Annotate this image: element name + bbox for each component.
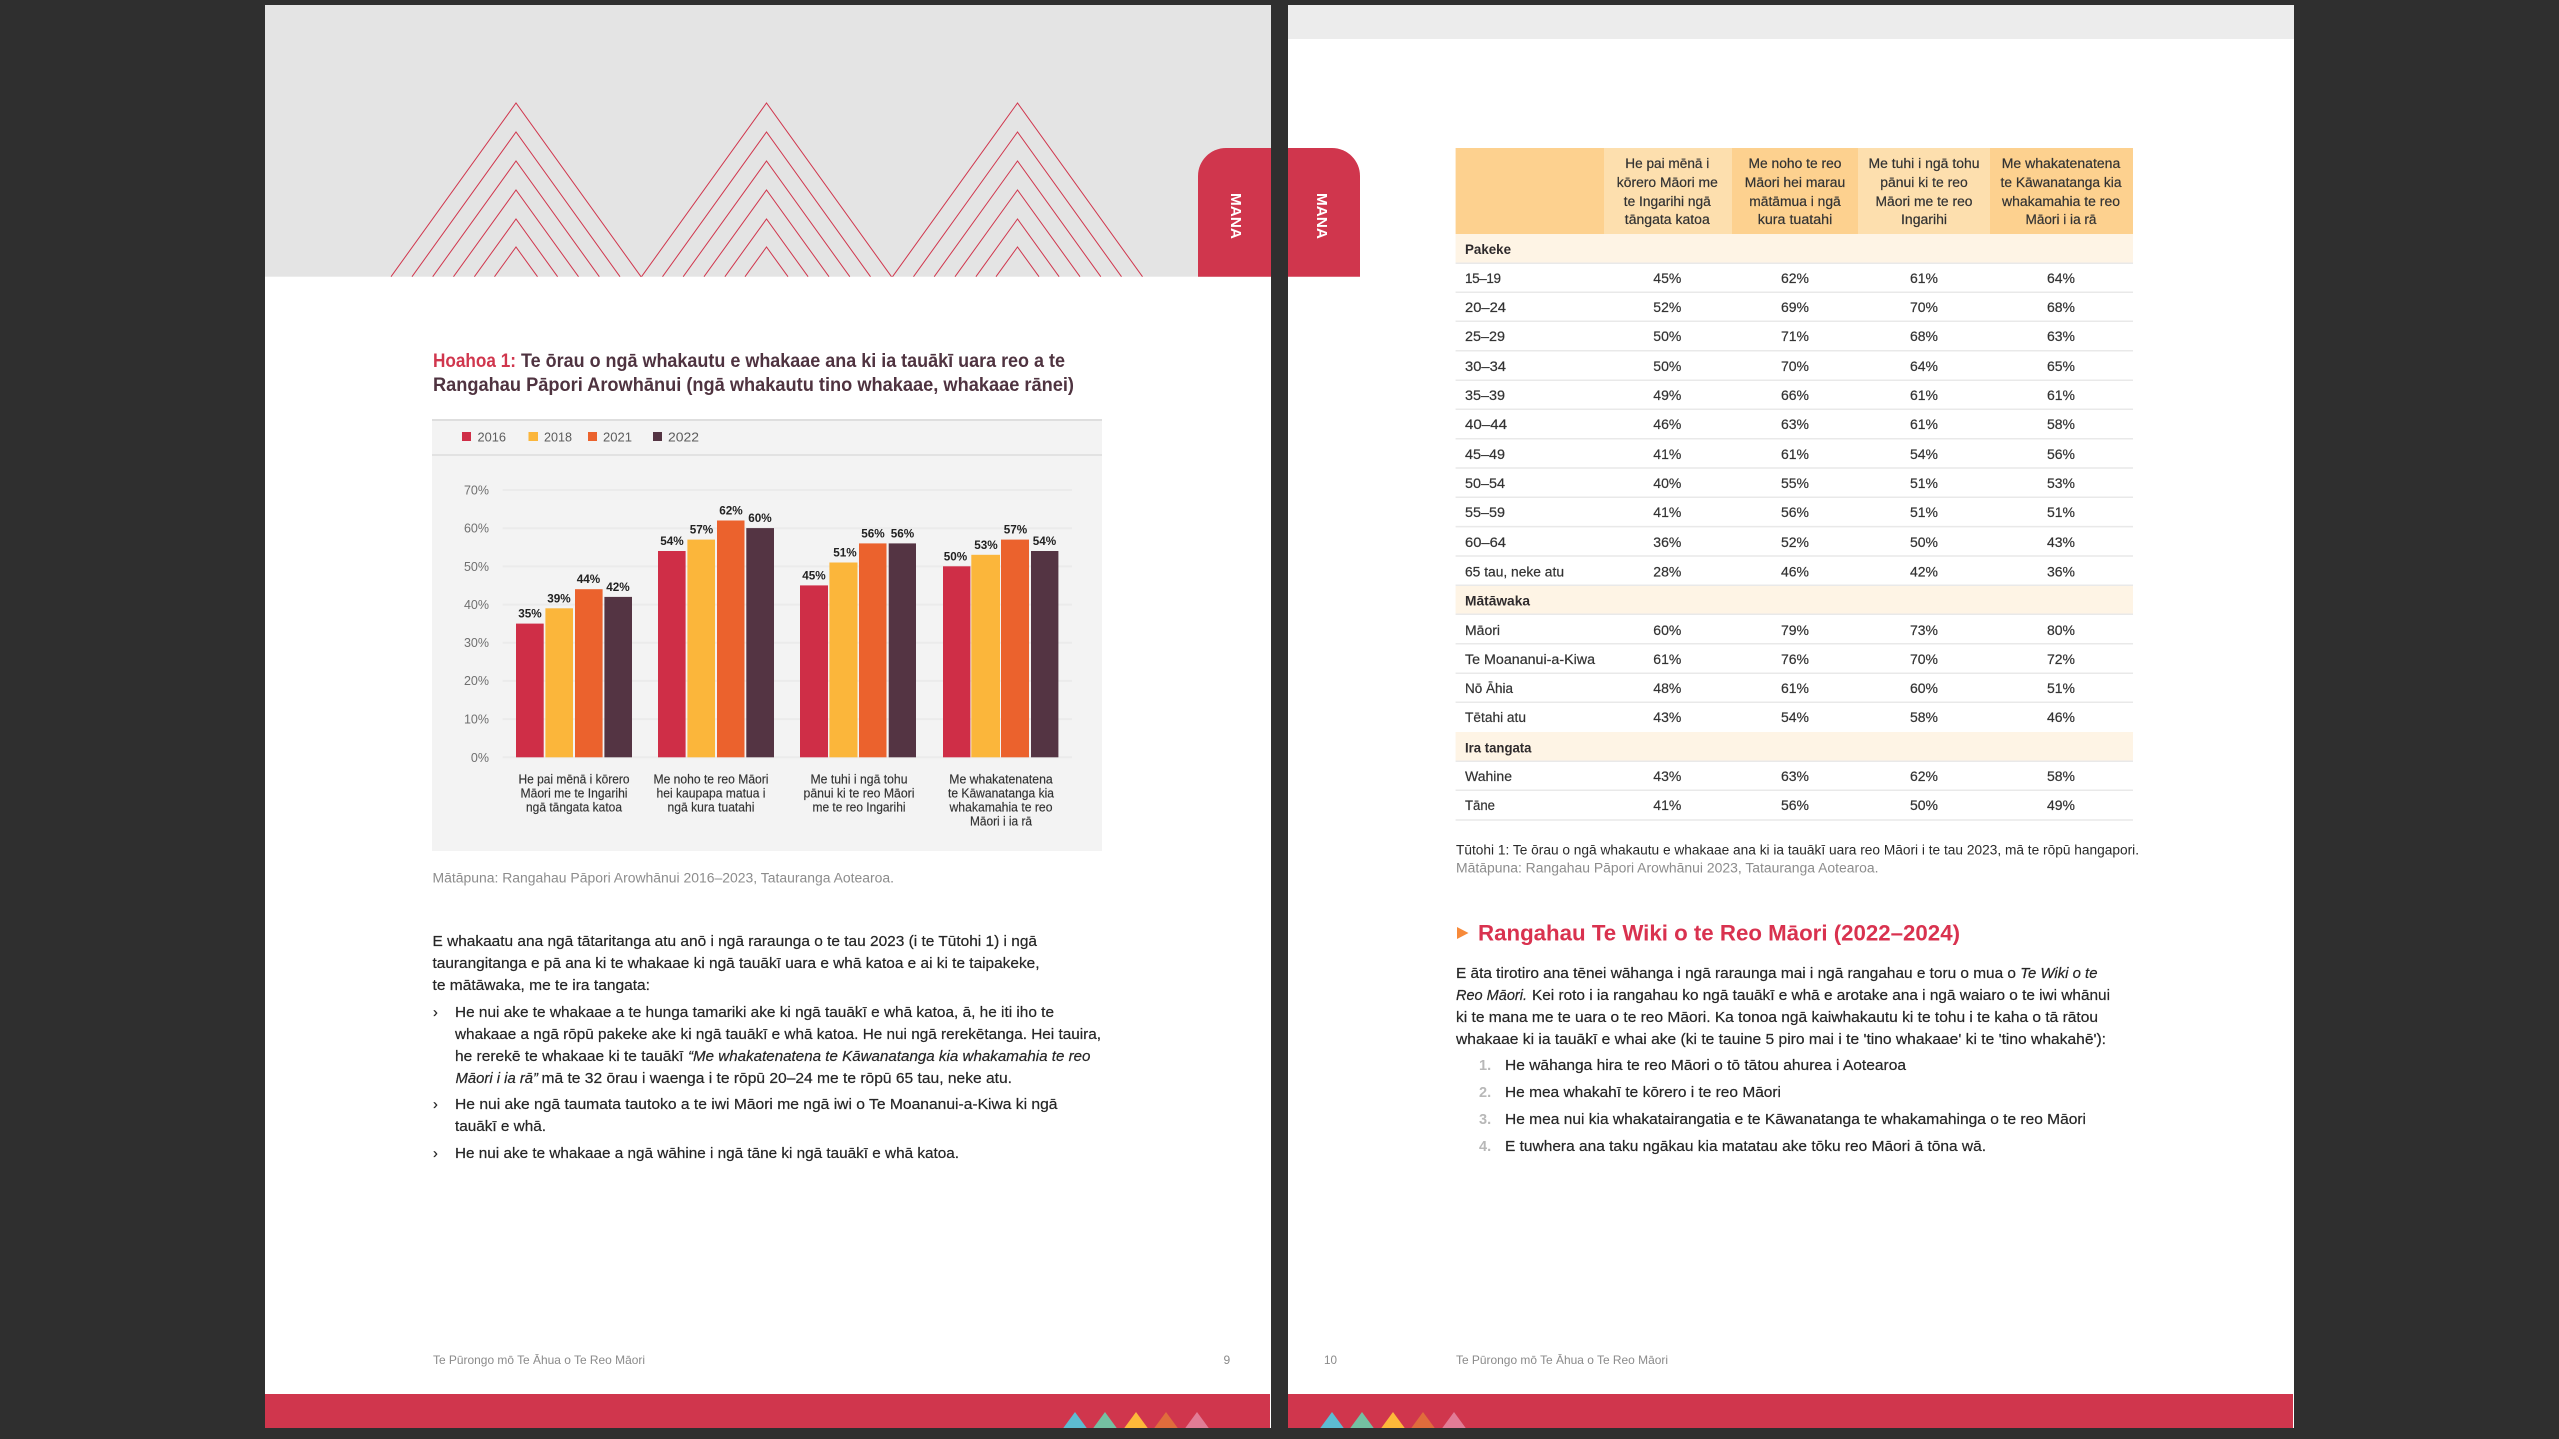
table header: mātāmua i ngā (1749, 194, 1841, 209)
category labels: hei kaupapa matua i (656, 786, 766, 800)
category labels: Māori me te Ingarihi (520, 786, 628, 800)
chart gridlines and y axis: 40% (464, 598, 489, 612)
table section: Pakeke: 35–39 (1465, 388, 1505, 403)
table section: Ira tangata: Ira tangata (1465, 740, 1532, 756)
table section: Pakeke: 60–64 (1465, 535, 1507, 550)
table section: Pakeke: 36% (1653, 534, 1681, 550)
text block: intro paragraph: taurangitanga e pā ana ki te whakaae ki ngā tauākī uara e whā katoa e ai ki te taipakeke, (432, 956, 1040, 972)
table section: Pakeke: 64% (1910, 358, 1938, 374)
table section: Pakeke: 49% (1653, 387, 1681, 403)
header band: left page (265, 5, 1271, 277)
table section: Pakeke: 61% (1781, 446, 1809, 462)
bullet list: He nui ake te whakaae a ngā wāhine i ngā tāne ki ngā tauākī e whā katoa. (455, 1146, 959, 1162)
table section: Mātāwaka: 76% (1781, 651, 1809, 667)
table section: Mātāwaka: 70% (1910, 651, 1938, 667)
bullet list: › (433, 1005, 438, 1021)
table section: Pakeke: 45–49 (1465, 447, 1505, 462)
footer band right (1288, 1394, 2293, 1428)
bar group 3: 56% (861, 528, 885, 540)
category labels: He pai mēnā i kōrero (518, 772, 630, 786)
category labels: me te reo Ingarihi (812, 800, 906, 814)
chart legend: 2018 (544, 430, 572, 444)
table section: Pakeke: 64% (2047, 270, 2075, 286)
table section: Ira tangata: 58% (2047, 768, 2075, 784)
bar group 3 (800, 528, 916, 757)
mountain pattern: nested triangles (391, 103, 1142, 277)
numbered list: He mea nui kia whakatairangatia e te Kāwanatanga te whakamahinga o te reo Māori (1505, 1112, 2086, 1128)
table section: Ira tangata: 56% (1781, 797, 1809, 813)
table section: Pakeke: 51% (1910, 475, 1938, 491)
table header: tāngata katoa (1625, 212, 1710, 227)
table section: Mātāwaka: Tētahi atu (1465, 710, 1526, 725)
chart gridlines and y axis (464, 484, 1072, 765)
table section: Pakeke: 66% (1781, 387, 1809, 403)
table section: Ira tangata: 63% (1781, 768, 1809, 784)
table section: Pakeke: 56% (2047, 446, 2075, 462)
text block: survey paragraph: ki te mana me te uara o te reo Māori. Ka tonoa ngā kaiwhakautu ki te tohu i te kaha o tā rātou (1456, 1010, 2098, 1026)
table section: Mātāwaka: Te Moananui-a-Kiwa (1465, 652, 1596, 667)
table section: Pakeke: 61% (2047, 387, 2075, 403)
table section: Pakeke: 58% (2047, 416, 2075, 432)
numbered list: E tuwhera ana taku ngākau kia matatau ake tōku reo Māori ā tōna wā. (1505, 1139, 1986, 1155)
table section: Ira tangata: 49% (2047, 797, 2075, 813)
table section: Pakeke: 68% (2047, 299, 2075, 315)
bar group 2: 62% (719, 506, 743, 518)
source note: chart: Mātāpuna: Rangahau Pāpori Arowhānui 2016–2023, Tatauranga Aotearoa. (432, 870, 894, 886)
table section: Ira tangata (1456, 732, 2133, 820)
table section: Pakeke: 65% (2047, 358, 2075, 374)
footer text right (1324, 1353, 1668, 1367)
text block: survey paragraph: Reo Māori. (1456, 988, 1527, 1004)
category labels (518, 772, 1054, 828)
table header: Ingarihi (1901, 212, 1947, 227)
bullet list: › (433, 1146, 438, 1162)
footer text left: Te Pūrongo mō Te Āhua o Te Reo Māori (433, 1353, 645, 1367)
tab: MANA right (1288, 148, 1360, 277)
table header (1456, 148, 2133, 234)
table section: Pakeke: 51% (1910, 504, 1938, 520)
bar group 2: 60% (748, 513, 772, 525)
tab: MANA right: MANA (1313, 193, 1329, 240)
heading: figure 1 title: Rangahau Pāpori Arowhānui (ngā whakautu tino whakaae, whakaae rānei) (433, 374, 1074, 396)
bar group 3: 45% (802, 570, 826, 582)
table section: Pakeke: 50% (1653, 358, 1681, 374)
chart legend: 2021 (603, 430, 632, 444)
table section: Ira tangata: 41% (1653, 797, 1681, 813)
table section: Pakeke: 46% (1781, 564, 1809, 580)
table section: Mātāwaka: 58% (1910, 709, 1938, 725)
text block: survey paragraph: E āta tirotiro ana tēnei wāhanga i ngā raraunga mai i ngā rangahau e toru o mua o (1456, 966, 2016, 982)
table section: Pakeke: 50–54 (1465, 476, 1506, 491)
table section: Pakeke: 30–34 (1465, 359, 1507, 374)
bullet list: Māori i ia rā” (456, 1071, 539, 1087)
category labels: ngā kura tuatahi (668, 800, 754, 814)
footer text left: 9 (1224, 1353, 1230, 1367)
category labels: te Kāwanatanga kia (948, 786, 1054, 800)
chart gridlines and y axis: 10% (464, 712, 489, 726)
table section: Pakeke: 71% (1781, 328, 1809, 344)
heading: figure 1 title (433, 350, 1074, 396)
table section: Ira tangata: Tāne (1465, 798, 1495, 813)
table section: Mātāwaka: Nō Āhia (1465, 681, 1513, 696)
chart gridlines and y axis: 20% (464, 674, 489, 688)
chart gridlines and y axis: 30% (464, 636, 489, 650)
bar group 3: 51% (833, 548, 857, 560)
bar group 4: 53% (974, 540, 998, 552)
footer band left (265, 1394, 1270, 1428)
bar group 4: 50% (944, 551, 967, 563)
chart gridlines and y axis: 70% (464, 484, 489, 498)
table header: Māori hei marau (1745, 175, 1845, 190)
bar group 1: 39% (547, 593, 571, 605)
table section: Pakeke: 51% (2047, 504, 2075, 520)
text block: survey paragraph: whakaae ki ia tauākī e whai ake (ki te tauine 5 piro mai i te 'tino whakaae' ki te 'tino whakahē'): (1455, 1032, 2106, 1048)
numbered list: 1. (1479, 1058, 1491, 1074)
table section: Pakeke: 40% (1653, 475, 1681, 491)
bar group 2 (658, 506, 774, 757)
table section: Mātāwaka: 79% (1781, 622, 1809, 638)
bullet list: › (433, 1097, 438, 1113)
bullet list: He nui ake te whakaae a te hunga tamariki ake ki ngā tauākī e whā katoa, ā, he iti iho te (455, 1005, 1054, 1021)
table section: Mātāwaka: Mātāwaka (1465, 592, 1530, 608)
chart legend (462, 430, 699, 444)
bar group 4: 54% (1033, 536, 1056, 548)
table section: Pakeke: 15–19 (1465, 271, 1501, 286)
table section: Pakeke: 69% (1781, 299, 1809, 315)
table header: Māori me te reo (1876, 194, 1972, 209)
table section: Pakeke: 42% (1910, 564, 1938, 580)
footer text left (433, 1353, 1230, 1367)
category labels: Me whakatenatena (949, 772, 1053, 786)
table section: Pakeke: 63% (1781, 416, 1809, 432)
table section: Mātāwaka: 43% (1653, 709, 1681, 725)
table section: Pakeke: 45% (1653, 270, 1681, 286)
table section: Mātāwaka: 60% (1910, 680, 1938, 696)
footer text right: Te Pūrongo mō Te Āhua o Te Reo Māori (1456, 1353, 1668, 1367)
numbered list: He wāhanga hira te reo Māori o tō tātou ahurea i Aotearoa (1505, 1058, 1907, 1074)
table section: Pakeke: 46% (1653, 416, 1681, 432)
table section: Pakeke: 41% (1653, 504, 1681, 520)
bullet list: “Me whakatenatena te Kāwanatanga kia whakamahia te reo (688, 1049, 1090, 1065)
table section: Pakeke (1456, 234, 2133, 585)
bar group 1: 42% (606, 582, 630, 594)
tab: MANA left: MANA (1227, 193, 1243, 240)
table header: pānui ki te reo (1880, 175, 1968, 190)
text block: intro paragraph: E whakaatu ana ngā tātaritanga atu anō i ngā raraunga o te tau 2023 (i te Tūtohi 1) i ngā (432, 934, 1038, 950)
text block: survey paragraph: Kei roto i ia rangahau ko ngā tauākī e whā e arotake ana i ngā waiaro o te iwi whānui (1532, 988, 2110, 1004)
bullet list: mā te 32 ōrau i waenga i te rōpū 20–24 me te rōpū 65 tau, neke atu. (542, 1071, 1012, 1087)
table section: Mātāwaka: 80% (2047, 622, 2075, 638)
category labels: whakamahia te reo (949, 800, 1053, 814)
table section: Pakeke: 54% (1910, 446, 1938, 462)
table section: Mātāwaka: 72% (2047, 651, 2075, 667)
text block: intro paragraph: te mātāwaka, me te ira tangata: (432, 978, 650, 994)
table section: Pakeke: 63% (2047, 328, 2075, 344)
bullet list: he rerekē te whakaae ki te tauākī (455, 1049, 684, 1065)
table header: Māori i ia rā (2026, 212, 2097, 227)
bullet list: whakaae a ngā rōpū pakeke ake ki ngā tauākī e whā katoa. He nui ngā rerekētanga. Hei tauira, (454, 1027, 1101, 1043)
table section: Ira tangata: 62% (1910, 768, 1938, 784)
table section: Pakeke: 40–44 (1465, 417, 1508, 432)
bar group 4: 57% (1004, 525, 1027, 537)
heading: Rangahau Te Wiki o te Reo Māori: Rangahau Te Wiki o te Reo Māori (2022–2024) (1478, 920, 1960, 946)
table section: Pakeke: 55% (1781, 475, 1809, 491)
table header: Me tuhi i ngā tohu (1868, 156, 1980, 171)
text block: intro paragraph (432, 934, 1040, 994)
table section: Pakeke: 52% (1653, 299, 1681, 315)
table section: Mātāwaka: 51% (2047, 680, 2075, 696)
table section: Mātāwaka: 60% (1653, 622, 1681, 638)
table section: Mātāwaka: 73% (1910, 622, 1938, 638)
category labels: Māori i ia rā (970, 814, 1032, 828)
table (1456, 148, 2133, 820)
table section: Pakeke: 62% (1781, 270, 1809, 286)
table section: Mātāwaka (1456, 586, 2133, 725)
table section: Pakeke: 70% (1781, 358, 1809, 374)
table caption: Mātāpuna: Rangahau Pāpori Arowhānui 2023, Tatauranga Aotearoa. (1456, 860, 1878, 876)
table section: Mātāwaka: Māori (1465, 623, 1500, 638)
chart gridlines and y axis: 60% (464, 522, 489, 536)
left page (265, 5, 1271, 1428)
chart gridlines and y axis: 50% (464, 560, 489, 574)
table section: Pakeke: 61% (1910, 270, 1938, 286)
table section: Pakeke: Pakeke (1465, 241, 1511, 257)
table section: Pakeke: 28% (1653, 564, 1681, 580)
bar group 2: 54% (660, 536, 684, 548)
bar group 1: 44% (577, 574, 600, 586)
bar group 1: 35% (518, 608, 542, 620)
right page (1288, 5, 2294, 1428)
table section: Mātāwaka: 46% (2047, 709, 2075, 725)
numbered list (1479, 1058, 2086, 1155)
table section: Pakeke: 65 tau, neke atu (1465, 564, 1564, 580)
bar group 4 (943, 525, 1058, 757)
table section: Pakeke: 53% (2047, 475, 2075, 491)
table header: He pai mēnā i (1625, 156, 1709, 171)
numbered list: He mea whakahī te kōrero i te reo Māori (1505, 1085, 1781, 1101)
text block: survey paragraph: Te Wiki o te (2020, 966, 2098, 982)
bullet list (433, 1005, 1101, 1162)
table section: Pakeke: 61% (1910, 387, 1938, 403)
table section: Pakeke: 25–29 (1465, 329, 1505, 344)
category labels: Me noho te reo Māori (654, 772, 768, 786)
bar group 1 (516, 574, 632, 757)
heading: figure 1 title: Te ōrau o ngā whakautu e whakaae ana ki ia tauākī uara reo a te (521, 350, 1065, 372)
table header: kura tuatahi (1758, 212, 1832, 227)
bullet list: tauākī e whā. (455, 1119, 546, 1135)
table section: Pakeke: 61% (1910, 416, 1938, 432)
table section: Pakeke: 55–59 (1465, 505, 1505, 520)
table section: Mātāwaka: 54% (1781, 709, 1809, 725)
table header: te Kāwanatanga kia (2000, 175, 2122, 190)
table caption (1456, 842, 2139, 876)
chart legend: 2022 (668, 430, 699, 444)
table section: Ira tangata: 50% (1910, 797, 1938, 813)
table section: Pakeke: 50% (1910, 534, 1938, 550)
table header: whakamahia te reo (2001, 194, 2120, 209)
chart gridlines and y axis: 0% (471, 751, 489, 765)
table section: Pakeke: 68% (1910, 328, 1938, 344)
table header: Me noho te reo (1748, 156, 1842, 171)
table section: Ira tangata: Wahine (1465, 769, 1512, 784)
category labels: ngā tāngata katoa (526, 800, 622, 814)
chart legend: 2016 (478, 430, 506, 444)
table section: Pakeke: 41% (1653, 446, 1681, 462)
table section: Pakeke: 70% (1910, 299, 1938, 315)
numbered list: 4. (1479, 1139, 1491, 1155)
table section: Mātāwaka: 61% (1653, 651, 1681, 667)
bullet list: He nui ake ngā taumata tautoko a te iwi Māori me ngā iwi o Te Moananui-a-Kiwa ki ngā (455, 1097, 1059, 1113)
table section: Pakeke: 56% (1781, 504, 1809, 520)
table section: Mātāwaka: 61% (1781, 680, 1809, 696)
table section: Pakeke: 20–24 (1465, 300, 1507, 315)
panel: bar chart (432, 419, 1102, 851)
table section: Mātāwaka: 48% (1653, 680, 1681, 696)
header band: right page (1288, 5, 2294, 39)
table header: te Ingarihi ngā (1624, 194, 1711, 209)
bar group 3: 56% (891, 528, 914, 540)
text block: survey paragraph (1455, 966, 2110, 1048)
numbered list: 3. (1479, 1112, 1491, 1128)
tab: MANA left (1198, 148, 1271, 277)
table section: Ira tangata: 43% (1653, 768, 1681, 784)
category labels: Me tuhi i ngā tohu (810, 772, 908, 786)
table caption: Tūtohi 1: Te ōrau o ngā whakautu e whakaae ana ki ia tauākī uara reo Māori i te tau 2023, mā te rōpū hangapori. (1456, 842, 2139, 858)
heading: figure 1 title: Hoahoa 1: (433, 350, 516, 372)
table section: Pakeke: 52% (1781, 534, 1809, 550)
table section: Pakeke: 50% (1653, 328, 1681, 344)
numbered list: 2. (1479, 1085, 1491, 1101)
bar group 2: 57% (690, 525, 713, 537)
table section: Pakeke: 36% (2047, 564, 2075, 580)
footer text right: 10 (1324, 1353, 1337, 1367)
table section: Pakeke: 43% (2047, 534, 2075, 550)
table header: kōrero Māori me (1617, 175, 1718, 190)
table header: Me whakatenatena (2002, 156, 2121, 171)
category labels: pānui ki te reo Māori (804, 786, 914, 800)
